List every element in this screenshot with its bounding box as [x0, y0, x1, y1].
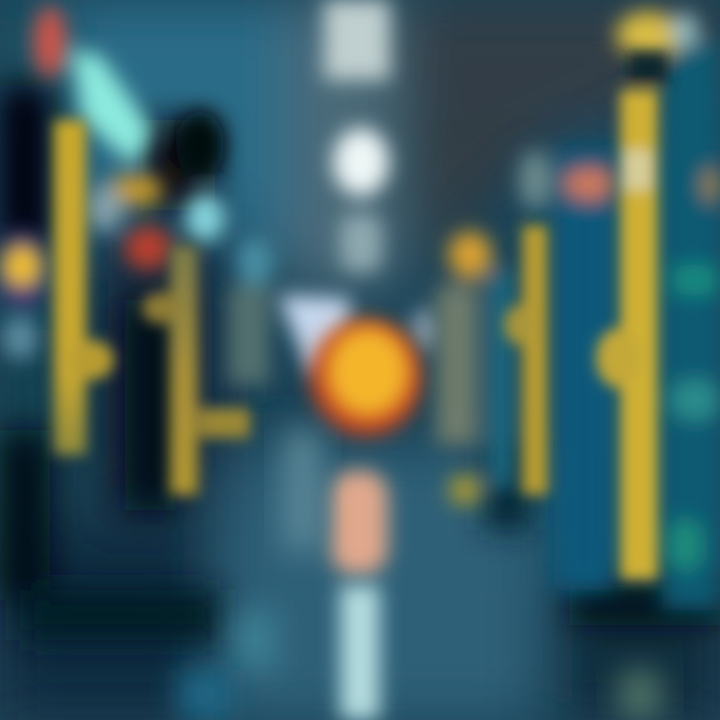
ceiling and central lights: [324, 0, 390, 272]
right yellow pillars: [504, 52, 668, 580]
left wall signs and lights: [0, 6, 273, 385]
left wall dark shadows: [0, 85, 720, 640]
floor reflections: [180, 430, 660, 720]
right wall panels and lights: [436, 11, 720, 610]
left yellow pillars: [54, 120, 250, 495]
central glowing orb: [278, 295, 441, 436]
